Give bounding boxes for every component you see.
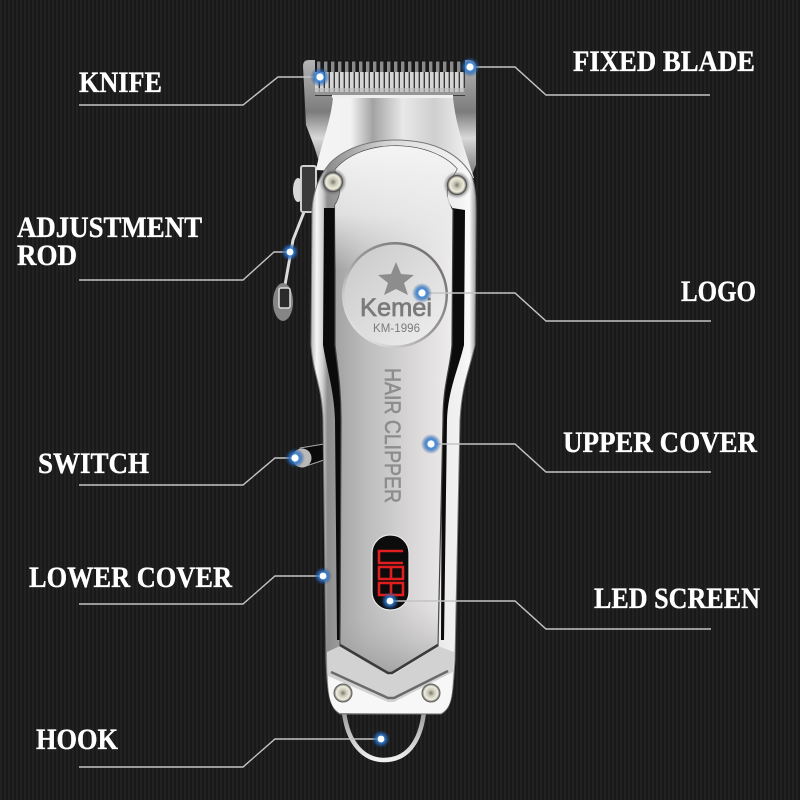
product name: HAIR CLIPPER <box>380 368 405 503</box>
callout: knife: KNIFE <box>79 66 162 99</box>
black side slots <box>323 208 343 640</box>
callout: adjustment rod: ROD <box>17 239 77 272</box>
callout: fixed blade <box>460 45 755 95</box>
body shell <box>311 140 476 714</box>
callout: upper cover <box>421 426 757 472</box>
callout: lower cover <box>29 561 332 604</box>
logo badge: KM-1996 <box>373 323 420 335</box>
lower chevron band <box>327 645 454 713</box>
callout: adjustment rod <box>17 211 299 280</box>
callout: adjustment rod: ADJUSTMENT <box>17 211 202 244</box>
screws <box>319 168 471 702</box>
hook <box>344 712 424 760</box>
adjustment rod <box>273 166 316 321</box>
led screen <box>372 535 409 610</box>
callout: knife <box>79 66 330 105</box>
callout: lower cover: LOWER COVER <box>29 561 232 594</box>
knife teeth <box>315 72 465 96</box>
logo badge: Kemei <box>360 294 432 322</box>
switch <box>292 444 324 468</box>
blade holder plate <box>303 60 476 175</box>
callout: upper cover: UPPER COVER <box>563 426 757 459</box>
callout: logo <box>412 275 756 321</box>
upper cover panel <box>335 146 457 673</box>
callout: switch <box>38 447 305 485</box>
callout: hook <box>36 723 390 767</box>
callout: hook: HOOK <box>36 723 119 756</box>
callout: led screen: LED SCREEN <box>594 582 760 615</box>
callout: led screen <box>381 582 760 629</box>
logo badge <box>342 242 448 348</box>
callout: logo: LOGO <box>681 275 756 308</box>
neck <box>316 98 474 178</box>
callout: fixed blade: FIXED BLADE <box>573 45 755 78</box>
hair clipper illustration <box>273 60 476 760</box>
fixed blade teeth <box>315 60 465 74</box>
callout: switch: SWITCH <box>38 447 149 480</box>
